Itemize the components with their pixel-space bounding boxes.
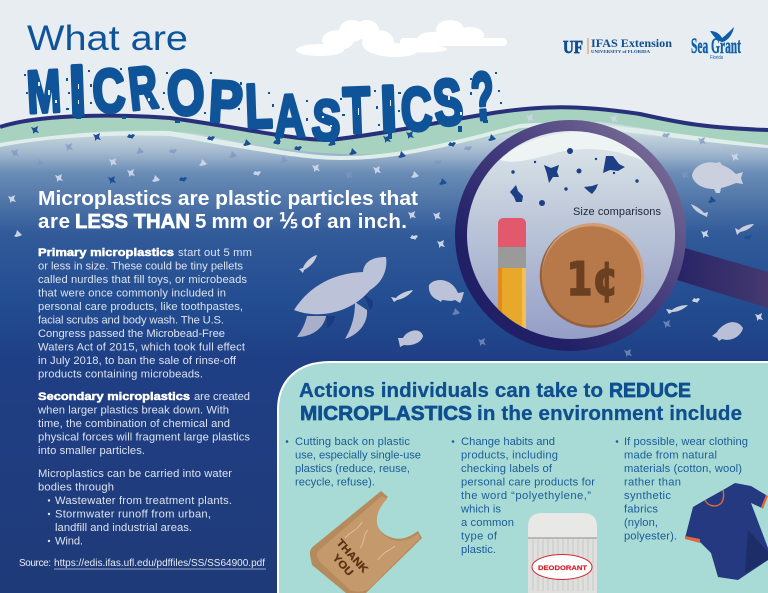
fish: lower right [712,322,743,341]
magnifying glass [455,120,768,351]
text block: secondary microplastics: physical forces will fragment large plastics [38,432,250,444]
title: MICROPLASTICS?: O [164,56,207,129]
fish: left of lens [429,280,464,303]
logo: UF IFAS Extension: UNIVERSITY of FLORIDA [591,49,651,54]
title: MICROPLASTICS?: R [125,53,161,123]
green wave band [0,108,768,154]
title: MICROPLASTICS?: S [310,87,342,153]
lens particles [510,148,639,206]
column 2 text: personal care products for [461,476,595,488]
text block: primary microplastics: or less in size. These could be tiny pellets [38,260,243,272]
heading: definition: Microplastics are plastic particles that [38,187,418,210]
column 1 text [286,436,421,488]
icon: paper bag: YOU [330,552,355,579]
heading: definition: of an inch. [301,210,407,233]
column 2 text: products, including [461,450,558,462]
title: MICROPLASTICS?: ? [469,58,497,135]
text block: primary microplastics: in July 2018, to ban the sale of rinse-off [38,355,237,367]
text block: pathways list: Wastewater from treatment plants. [55,495,232,507]
panel heading: Actions individuals can take to [299,379,603,402]
text block: pathways list: Stormwater runoff from urban, [55,508,211,520]
text block: secondary microplastics: Secondary microplastics [38,391,190,403]
icon: deodorant [528,513,597,593]
handle [677,248,768,308]
floating particles: mid blue [11,133,706,357]
cloud [296,20,507,57]
column 3 text: materials (cotton, wool) [624,463,742,475]
text block: pathways list: landfill and industrial areas. [55,522,192,534]
column 3 text: fabrics [624,504,658,516]
title: MICROPLASTICS?: M [25,58,63,126]
text block: primary microplastics: personal care products, like toothpastes, [38,301,243,313]
column 3 text [616,436,748,542]
title drips [76,115,488,145]
column 3 text: (nylon, [624,517,658,529]
floating particles: light [8,114,763,321]
title: What are: What are [27,19,188,58]
text block: secondary microplastics: when larger plastics break down. With [37,404,229,416]
column 2 text: Change habits and [461,436,555,448]
title: MICROPLASTICS? [24,51,502,153]
logo: UF IFAS Extension: UF [563,37,583,57]
heading: definition: 5 mm or [195,210,273,233]
small slender fish group [299,204,754,314]
column 2 text [452,436,595,556]
text block: pathways list: Wind. [55,536,83,548]
column 1 text: use, especially single-use [295,450,421,462]
text block: secondary microplastics: time, the combination of chemical and [38,418,230,430]
title: MICROPLASTICS?: C [90,56,127,127]
panel heading [299,379,742,425]
title distress marks [38,82,462,127]
floating particles: dark [31,126,752,240]
text block: primary microplastics: that were once commonly included in [38,288,226,300]
lens [467,131,675,339]
title: MICROPLASTICS?: C [399,75,434,145]
title: MICROPLASTICS?: P [207,67,244,136]
text block: primary microplastics: Primary microplastics [38,247,174,259]
title specks [24,68,502,126]
text block: primary microplastics: called nurdles that fill toys, or microbeads [38,274,247,286]
title: MICROPLASTICS?: L [244,72,274,142]
size comparisons label: Size comparisons [573,206,662,218]
text block: pathways list: Microplastics can be carried into water [38,468,232,480]
column 3 text: synthetic [624,490,671,502]
panel heading: in the environment include [477,402,742,425]
text block: secondary microplastics: are created [194,391,250,403]
column 3 text: made from natural [624,450,717,462]
deodorant label: DEODORANT [538,565,588,572]
ring [455,120,686,351]
heading: definition: LESS THAN [75,210,190,233]
column 2 text: a common [461,517,514,529]
logo: Sea Grant Florida [691,27,741,61]
title: MICROPLASTICS?: S [430,64,466,140]
text block: primary microplastics: facial scrubs and body wash. The U.S. [38,314,224,326]
wave surface line [0,107,768,140]
column 3 text: If possible, wear clothing [624,436,748,448]
panel heading: MICROPLASTICS [300,402,472,425]
text block: secondary microplastics: into smaller particles. [38,445,145,457]
turtle [294,257,386,339]
title: MICROPLASTICS?: I [68,51,87,130]
title: MICROPLASTICS?: I [379,72,398,146]
column 2 text: type of [461,530,498,542]
column 3 text: polyester). [624,530,677,542]
penny [540,223,644,328]
text block: primary microplastics: products containing microbeads. [38,368,203,380]
text block: pathways list [38,468,232,548]
logo: UF IFAS Extension [563,37,673,57]
text block: primary microplastics: Waters Act of 2015, which took full effect [38,342,246,354]
text block: pathways list: bodies through [38,482,114,494]
column 1 text: Cutting back on plastic [295,436,410,448]
penny: 1¢ [566,252,618,306]
column 2 text: checking labels of [461,463,553,475]
pencil [498,218,526,329]
heading: definition: are [38,210,70,233]
text block: primary microplastics: Congress passed the Microbead-Free [38,328,225,340]
white wave strip [0,123,768,160]
heading: definition [38,187,418,233]
column 2 text: the word “polyethylene,” [461,490,591,502]
icon: paper bag [310,491,422,593]
text block: secondary microplastics [37,391,250,457]
fish: lower centre [398,330,423,347]
logo: UF IFAS Extension: IFAS Extension [591,38,673,50]
fish: upper right [692,162,743,193]
bag label: THANK [334,537,370,576]
text block: primary microplastics: start out 5 mm [178,247,252,259]
column 3 text: rather than [624,476,681,488]
lens highlight [500,132,644,162]
panel: actions [278,362,768,593]
panel heading: REDUCE [609,379,691,402]
source line: Source: [19,558,51,569]
text block: primary microplastics [38,247,252,380]
column 1 text: plastics (reduce, reuse, [295,463,410,475]
icon: t-shirt [685,483,768,580]
title: MICROPLASTICS?: T [342,74,372,147]
column 2 text: plastic. [461,544,496,556]
column 1 text: recycle, refuse). [295,476,375,488]
logo: Sea Grant Florida: Florida [710,55,723,61]
heading: definition: ⅕ [279,210,298,233]
title: MICROPLASTICS?: A [273,82,306,150]
column 2 text: which is [460,504,501,516]
source line: https://edis.ifas.ufl.edu/pdffiles/SS/SS64900.pdf [54,558,265,569]
